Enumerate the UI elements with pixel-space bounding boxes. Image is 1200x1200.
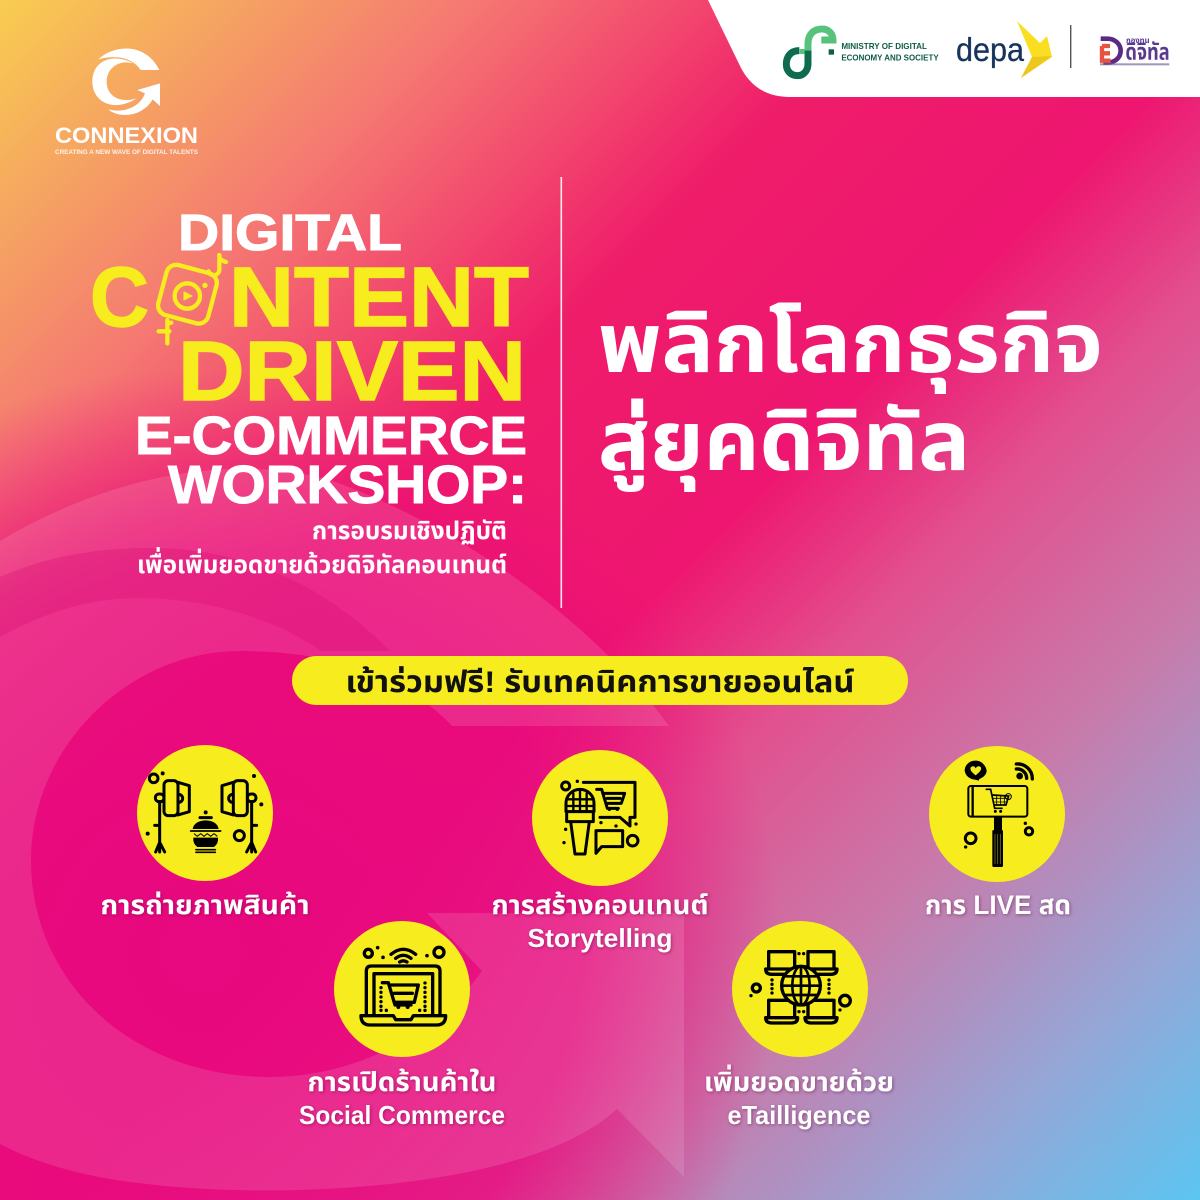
- logo: digital fund: ดิจิทัล: [1125, 38, 1170, 64]
- logo: ministry of digital economy: MINISTRY OF DIGITAL: [841, 41, 927, 51]
- logo: depa: depa: [956, 31, 1025, 68]
- header white panel: [708, 0, 1200, 97]
- icon: camera play in title: [156, 255, 226, 343]
- subtitle: การอบรมเชิงปฏิบัติ: [312, 517, 507, 545]
- title: Digital Content Driven E-Commerce Workshop: WORKSHOP:: [168, 455, 527, 515]
- subtitle: เพื่อเพิ่มยอดขายด้วยดิจิทัลคอนเทนต์: [137, 547, 507, 579]
- title: Digital Content Driven E-Commerce Workshop: NTENT: [229, 250, 529, 344]
- logo: ministry of digital economy: ECONOMY AND SOCIETY: [841, 53, 939, 63]
- item: content storytelling: Storytelling: [528, 923, 672, 953]
- logo: ministry of digital economy: [786, 29, 939, 76]
- item: eTailligence: เพิ่มยอดขายด้วย: [704, 1065, 894, 1097]
- icon: studio lights and jar: [146, 771, 263, 852]
- logo: Connexion: CREATING A NEW WAVE OF DIGITAL TALENTS: [55, 149, 199, 156]
- item: content storytelling: [492, 750, 708, 953]
- headline Thai: สู่ยุคดิจิทัล: [598, 394, 970, 492]
- icon: selfie stick phone: [964, 761, 1033, 867]
- item: product photography: [100, 745, 310, 920]
- headline Thai: [598, 296, 1103, 492]
- item: content storytelling: การสร้างคอนเทนต์: [492, 890, 708, 920]
- item: social commerce: การเปิดร้านค้าใน: [308, 1067, 496, 1097]
- callout pill: เข้าร่วมฟรี! รับเทคนิคการขายออนไลน์: [346, 666, 854, 699]
- icon: laptop cart: [361, 946, 446, 1025]
- logo: digital fund: กองทุน: [1126, 36, 1150, 46]
- logo: Connexion: [55, 49, 199, 156]
- title: Digital Content Driven E-Commerce Workshop: [90, 204, 529, 515]
- icon: globe and laptops: [749, 952, 850, 1023]
- item: social commerce: Social Commerce: [299, 1100, 505, 1130]
- title: Digital Content Driven E-Commerce Workshop: C: [90, 250, 149, 344]
- item: eTailligence: eTailligence: [728, 1100, 870, 1130]
- callout pill: [292, 656, 908, 705]
- logo: Connexion: CONNEXION: [55, 123, 198, 148]
- item: live: [925, 746, 1071, 920]
- background: large logo watermark: [0, 469, 684, 1190]
- title: Digital Content Driven E-Commerce Workshop: DIGITAL: [178, 204, 402, 261]
- title: Digital Content Driven E-Commerce Workshop: E-COMMERCE: [135, 406, 527, 466]
- subtitle: [137, 517, 507, 579]
- headline Thai: พลิกโลกธุรกิจ: [598, 296, 1103, 394]
- icon: microphone and speech bubbles: [562, 780, 638, 854]
- title: Digital Content Driven E-Commerce Workshop: DRIVEN: [178, 324, 526, 418]
- item: eTailligence: [704, 921, 894, 1130]
- item: social commerce: [299, 921, 505, 1130]
- item: product photography: การถ่ายภาพสินค้า: [100, 890, 310, 920]
- item: live: การ LIVE สด: [925, 890, 1071, 920]
- logo: depa: [956, 21, 1052, 78]
- logo: digital fund: [1100, 36, 1170, 65]
